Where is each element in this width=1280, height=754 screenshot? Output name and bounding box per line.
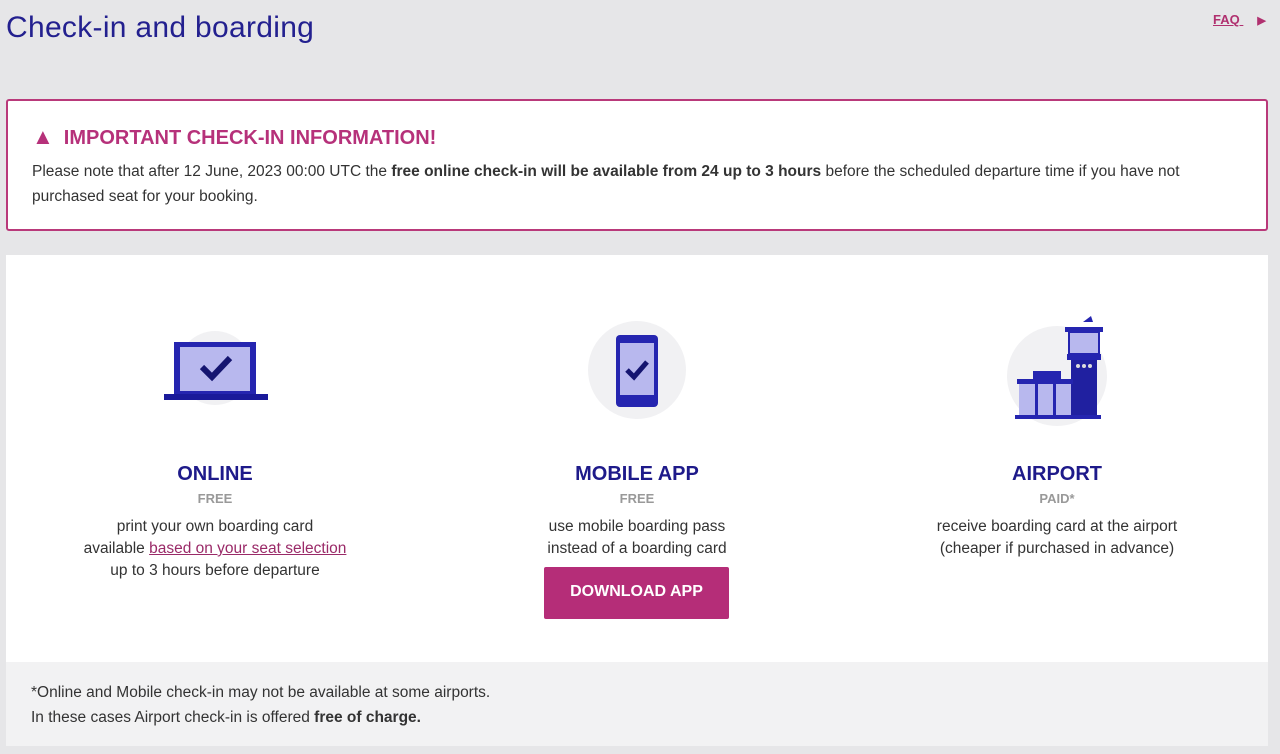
icon: airport — [1007, 316, 1107, 426]
title: Check-in and boarding — [6, 11, 314, 44]
column: mobile app — [547, 463, 727, 557]
column: online: print your own boarding card — [117, 518, 313, 535]
column: mobile app: MOBILE APP — [575, 463, 699, 485]
alert heading: ▲ IMPORTANT CHECK-IN INFORMATION! — [32, 124, 436, 149]
icon: phone — [588, 321, 686, 419]
column: airport: PAID* — [1039, 491, 1075, 506]
panel: important info — [6, 99, 1268, 231]
footer note: *Online and Mobile check-in may not be available at some airports. — [31, 684, 490, 701]
FAQ link — [1213, 12, 1266, 27]
FAQ link: FAQ — [1213, 12, 1240, 27]
alert text: Please note that after 12 June, 2023 00:00 UTC the free online check-in will be available from 24 up to 3 hours before the scheduled departure time if you have not purchased seat for your booking. — [32, 163, 1180, 205]
button: download app: DOWNLOAD APP — [570, 583, 703, 600]
column: airport: receive boarding card at the airport — [937, 518, 1177, 535]
FAQ link: ▶ — [1257, 15, 1266, 27]
panel: options — [6, 255, 1268, 662]
column: mobile app: use mobile boarding pass — [549, 518, 725, 535]
column: mobile app: FREE — [620, 491, 654, 506]
column: online: ONLINE — [177, 463, 253, 485]
footer note: In these cases Airport check-in is offered free of charge. — [31, 709, 421, 726]
button: download app — [544, 567, 729, 619]
column: online: FREE — [198, 491, 232, 506]
column: airport — [937, 463, 1178, 557]
footer note — [6, 662, 1268, 746]
column: mobile app: instead of a boarding card — [547, 540, 727, 557]
column: airport: AIRPORT — [1012, 463, 1102, 485]
column: online: available based on your seat selection — [84, 540, 346, 557]
column: online: up to 3 hours before departure — [110, 562, 320, 579]
column: online — [84, 463, 346, 579]
icon: laptop — [164, 331, 268, 405]
column: airport: (cheaper if purchased in advance) — [940, 540, 1174, 557]
